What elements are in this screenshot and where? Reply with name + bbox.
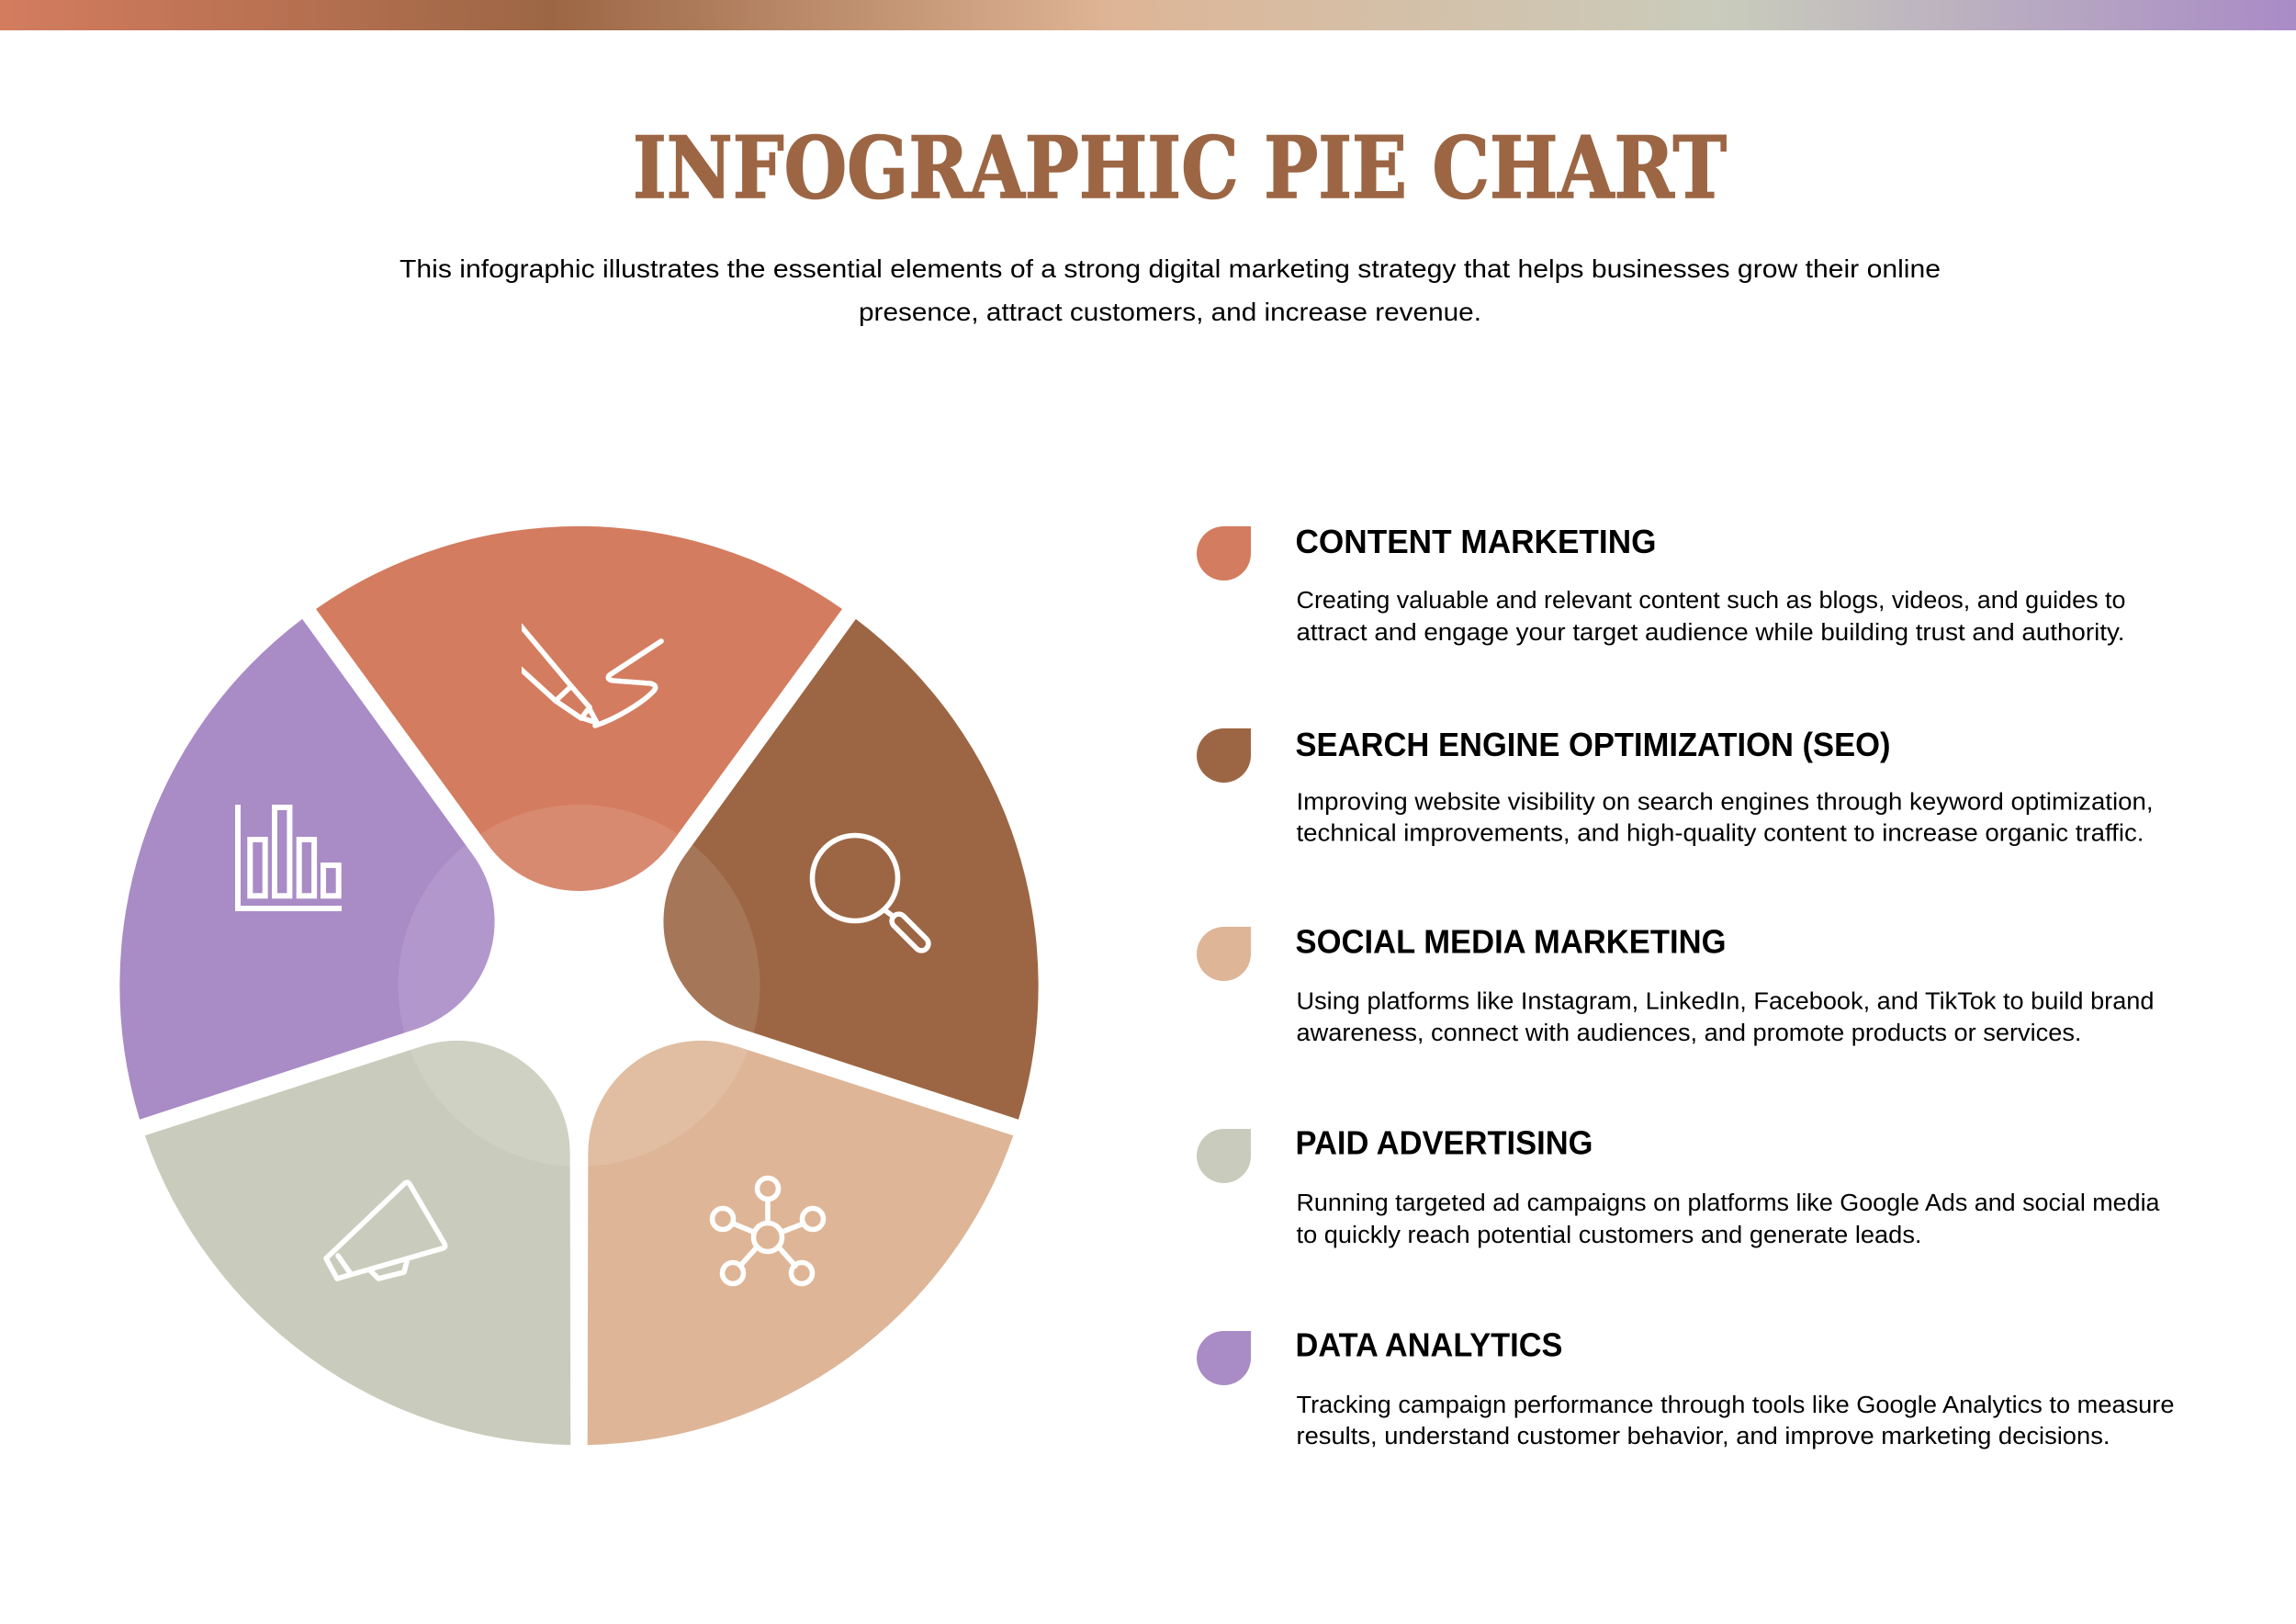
segment: paid advertising <box>96 908 737 1512</box>
description: to quickly reach potential customers and generate leads. <box>1297 1223 1921 1248</box>
description: Tracking campaign performance through tools like Google Analytics to measure <box>1297 1393 2175 1418</box>
segment: data analytics <box>61 593 570 1207</box>
description <box>1297 988 2155 1046</box>
intro paragraph: presence, attract customers, and increase revenue. <box>859 298 1481 326</box>
segment: social media marketing <box>422 908 1062 1512</box>
description <box>1297 588 2125 646</box>
marker <box>1197 728 1251 783</box>
description <box>1297 1393 2175 1449</box>
marker <box>1197 1129 1251 1183</box>
marker <box>1197 526 1251 581</box>
intro paragraph: This infographic illustrates the essential elements of a strong digital marketing strategy that helps businesses grow their online <box>400 254 1941 283</box>
description: attract and engage your target audience while building trust and authority. <box>1297 620 2125 646</box>
icon: magnifying glass <box>812 836 931 953</box>
legend item: seo <box>1197 726 2153 847</box>
icon: bar chart <box>238 805 342 908</box>
pie chart <box>119 525 1039 1446</box>
top gradient bar <box>0 0 2296 30</box>
legend item: data analytics <box>1197 1326 2175 1449</box>
legend item: social media marketing <box>1197 922 2155 1046</box>
description: Using platforms like Instagram, LinkedIn, Facebook, and TikTok to build brand <box>1297 988 2155 1014</box>
segment: search engine optimization <box>588 593 1097 1207</box>
heading: PAID ADVERTISING <box>1295 1124 1593 1161</box>
icon: network <box>713 1178 823 1284</box>
heading: SEARCH ENGINE OPTIMIZATION (SEO) <box>1295 726 1890 763</box>
title: INFOGRAPHIC PIE CHART <box>633 118 1727 218</box>
description: Improving website visibility on search engines through keyword optimization, <box>1297 790 2153 816</box>
description: results, understand customer behavior, and improve marketing decisions. <box>1297 1424 2110 1449</box>
description: technical improvements, and high-quality content to increase organic traffic. <box>1297 821 2144 847</box>
icon: pen <box>514 618 661 726</box>
intro paragraph <box>400 254 1941 326</box>
description <box>1297 790 2153 847</box>
translucent center circle <box>399 805 760 1167</box>
heading: DATA ANALYTICS <box>1295 1326 1563 1363</box>
description: Running targeted ad campaigns on platforms like Google Ads and social media <box>1297 1190 2160 1216</box>
description <box>1297 1190 2160 1248</box>
marker <box>1197 1331 1251 1385</box>
legend item: paid advertising <box>1197 1124 2160 1248</box>
heading: CONTENT MARKETING <box>1295 523 1657 560</box>
description: Creating valuable and relevant content such as blogs, videos, and guides to <box>1297 588 2125 614</box>
description: awareness, connect with audiences, and promote products or services. <box>1297 1021 2081 1046</box>
legend item: content marketing <box>1197 523 2125 646</box>
segment: content marketing <box>316 526 842 891</box>
icon: megaphone <box>326 1182 445 1279</box>
heading: SOCIAL MEDIA MARKETING <box>1295 922 1727 961</box>
marker <box>1197 927 1251 981</box>
